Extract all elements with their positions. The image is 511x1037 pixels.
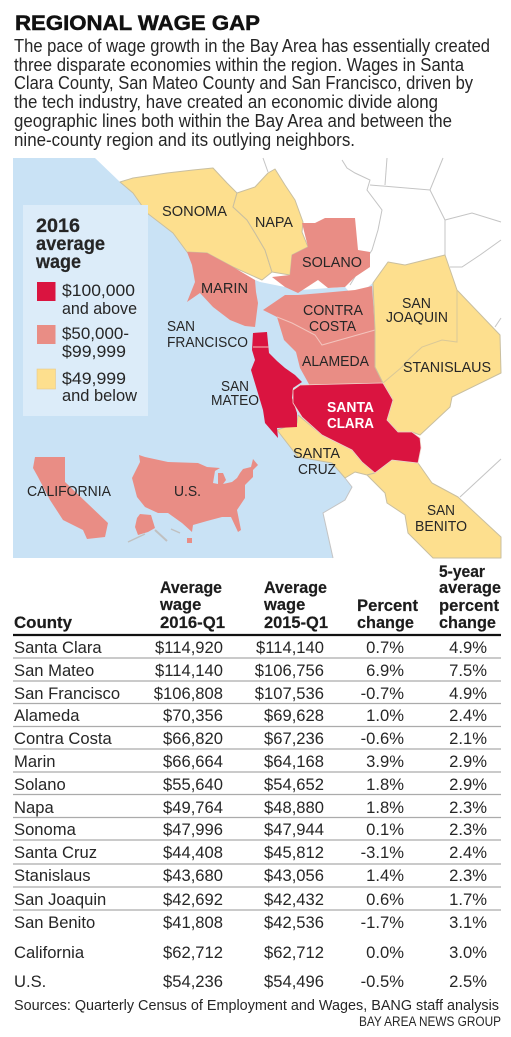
- row: San Benito: -1.7%: [361, 913, 404, 932]
- row: Stanislaus: 2.3%: [449, 866, 487, 885]
- row: Santa Cruz: $45,812: [264, 843, 324, 862]
- table header: Average: [264, 579, 327, 597]
- row: California: $62,712: [163, 943, 223, 962]
- row: Santa Cruz: Santa Cruz: [14, 843, 97, 862]
- row: Napa: $49,764: [163, 798, 223, 817]
- row: San Francisco: 4.9%: [449, 684, 487, 703]
- row: San Mateo: [14, 661, 487, 680]
- row: Napa: [14, 798, 487, 817]
- inset map: California: CALIFORNIA: [27, 484, 111, 500]
- table header: 2016-Q1: [160, 614, 225, 632]
- row: San Mateo: San Mateo: [14, 661, 94, 680]
- table header: wage: [263, 596, 305, 614]
- table rows: [14, 638, 487, 991]
- row: San Joaquin: 1.7%: [449, 890, 487, 909]
- county labels: SOLANO: [302, 255, 362, 271]
- row: Solano: $54,652: [264, 775, 324, 794]
- county labels: COSTA: [309, 319, 356, 335]
- row: San Benito: 3.1%: [449, 913, 487, 932]
- row: Alameda: 1.0%: [366, 706, 404, 725]
- row: Contra Costa: Contra Costa: [14, 729, 113, 748]
- neighbouring county borders: [263, 158, 501, 558]
- row: Stanislaus: $43,680: [163, 866, 223, 885]
- Contra Costa / Alameda border: [277, 317, 375, 345]
- row: Napa: $48,880: [264, 798, 324, 817]
- row: San Joaquin: $42,692: [163, 890, 223, 909]
- row: Santa Clara: 0.7%: [366, 638, 404, 657]
- intro text: three disparate economies within the region. Wages in Santa: [14, 55, 465, 75]
- legend item: $49,999 and below: $49,999: [62, 369, 126, 388]
- table rules: [13, 635, 501, 910]
- row: California: 3.0%: [449, 943, 487, 962]
- legend title: 2016: [36, 216, 80, 237]
- legend item: $100,000 and above: [37, 281, 137, 318]
- row: Napa: Napa: [14, 798, 54, 817]
- row: Alameda: $70,356: [163, 706, 223, 725]
- table header: Average: [160, 579, 222, 597]
- legend item: $100,000 and above: $100,000: [62, 281, 135, 300]
- county labels: STANISLAUS: [403, 360, 491, 376]
- row: Napa: 1.8%: [366, 798, 404, 817]
- inset map: U.S.: U.S.: [174, 484, 201, 500]
- inset map: California: [27, 457, 111, 539]
- panel: map: [13, 158, 501, 558]
- row: Contra Costa: $67,236: [264, 729, 324, 748]
- row: San Mateo: $106,756: [255, 661, 324, 680]
- row: Santa Cruz: -3.1%: [361, 843, 404, 862]
- legend item: $50,000-$99,999: $99,999: [62, 342, 126, 361]
- legend item: $100,000 and above: and above: [62, 299, 137, 318]
- row: Solano: [14, 775, 487, 794]
- county: Sonoma: [120, 168, 272, 280]
- row: Marin: 2.9%: [449, 752, 487, 771]
- county: Napa: [233, 169, 308, 275]
- row: Santa Clara: $114,140: [256, 638, 324, 657]
- row: Sonoma: Sonoma: [14, 820, 77, 839]
- row: Marin: $64,168: [264, 752, 324, 771]
- county labels: SAN: [167, 319, 195, 335]
- San Francisco border: [253, 346, 269, 348]
- row: U.S.: -0.5%: [361, 972, 404, 991]
- county: Santa Clara: [293, 383, 421, 473]
- county: San Mateo and San Francisco: [251, 332, 302, 438]
- legend: [23, 205, 148, 416]
- county labels: SONOMA: [162, 204, 227, 220]
- table header: change: [357, 614, 414, 632]
- legend title: wage: [35, 252, 81, 273]
- county labels: SAN: [427, 503, 455, 519]
- row: U.S.: 2.5%: [449, 972, 487, 991]
- row: California: $62,712: [264, 943, 324, 962]
- row: Sonoma: $47,996: [163, 820, 223, 839]
- table header: County: [14, 614, 73, 632]
- table header: change: [439, 614, 496, 632]
- row: California: California: [14, 943, 85, 962]
- county labels: SANTA: [327, 400, 375, 416]
- county labels: SAN: [402, 296, 431, 312]
- row: Alameda: [14, 706, 487, 725]
- row: Alameda: Alameda: [14, 706, 80, 725]
- intro text: the tech industry, have created an economic divide along: [14, 92, 438, 112]
- row: San Benito: San Benito: [14, 913, 95, 932]
- row: Santa Cruz: 2.4%: [449, 843, 487, 862]
- county labels: SAN: [221, 379, 249, 395]
- county labels: MARIN: [201, 281, 248, 297]
- county: Alameda: [277, 317, 385, 386]
- table header: 5-year: [439, 563, 486, 581]
- row: California: 0.0%: [366, 943, 404, 962]
- row: San Joaquin: San Joaquin: [14, 890, 106, 909]
- legend item: $50,000-$99,999: [37, 324, 129, 361]
- row: Alameda: 2.4%: [449, 706, 487, 725]
- row: Sonoma: [14, 820, 487, 839]
- row: San Francisco: San Francisco: [14, 684, 120, 703]
- row: Solano: Solano: [14, 775, 66, 794]
- row: Santa Cruz: $44,408: [163, 843, 223, 862]
- county: Marin: [187, 252, 258, 327]
- intro text: Clara County, San Mateo County and San Francisco, driven by: [14, 73, 473, 93]
- row: San Joaquin: $42,432: [264, 890, 324, 909]
- county: Santa Cruz: [277, 415, 375, 478]
- row: Santa Clara: 4.9%: [449, 638, 487, 657]
- row: San Benito: [14, 913, 487, 932]
- row: U.S.: $54,496: [264, 972, 324, 991]
- county labels: JOAQUIN: [386, 310, 448, 326]
- row: Stanislaus: 1.4%: [366, 866, 404, 885]
- row: U.S.: [14, 972, 487, 991]
- row: Alameda: $69,628: [264, 706, 324, 725]
- intro text: nine-county region and its outlying neighbors.: [14, 130, 355, 150]
- table header: [14, 563, 501, 632]
- row: San Francisco: [14, 684, 487, 703]
- row: Sonoma: $47,944: [264, 820, 324, 839]
- county: San Joaquin and Stanislaus: [373, 255, 501, 435]
- row: Sonoma: 2.3%: [449, 820, 487, 839]
- table header: wage: [159, 596, 201, 614]
- row: San Francisco: -0.7%: [361, 684, 404, 703]
- county labels: MATEO: [211, 393, 259, 409]
- legend item: $50,000-$99,999: $50,000-: [62, 324, 129, 343]
- row: San Joaquin: 0.6%: [366, 890, 404, 909]
- row: California: [14, 943, 487, 962]
- row: Stanislaus: $43,056: [264, 866, 324, 885]
- intro text: [14, 36, 490, 150]
- row: Napa: 2.3%: [449, 798, 487, 817]
- row: San Mateo: 6.9%: [366, 661, 404, 680]
- legend item: $49,999 and below: and below: [62, 386, 138, 405]
- row: Contra Costa: -0.6%: [361, 729, 404, 748]
- row: Stanislaus: Stanislaus: [14, 866, 91, 885]
- row: Marin: Marin: [14, 752, 56, 771]
- row: Marin: [14, 752, 487, 771]
- row: Santa Clara: Santa Clara: [14, 638, 102, 657]
- county: San Benito: [367, 460, 501, 558]
- county labels: [162, 204, 491, 535]
- table header: percent: [439, 597, 500, 615]
- legend item: $49,999 and below: [37, 369, 138, 405]
- row: San Mateo: $114,140: [155, 661, 223, 680]
- legend title: [35, 216, 105, 273]
- row: Solano: 1.8%: [366, 775, 404, 794]
- county labels: NAPA: [255, 215, 293, 231]
- table header: 2015-Q1: [264, 614, 328, 632]
- row: San Francisco: $107,536: [255, 684, 324, 703]
- table header: Percent: [357, 597, 419, 615]
- row: San Benito: $42,536: [264, 913, 324, 932]
- title: REGIONAL WAGE GAP: [15, 12, 260, 35]
- intro text: geographic lines both within the Bay Area and between the: [14, 111, 452, 131]
- county labels: CRUZ: [298, 462, 336, 478]
- row: Stanislaus: [14, 866, 487, 885]
- row: Solano: 2.9%: [449, 775, 487, 794]
- county labels: ALAMEDA: [302, 354, 369, 370]
- county labels: FRANCISCO: [167, 335, 248, 351]
- row: Santa Clara: $114,920: [155, 638, 223, 657]
- county: Solano: [272, 218, 370, 293]
- row: Contra Costa: 2.1%: [449, 729, 487, 748]
- land background: [13, 158, 501, 558]
- row: Marin: 3.9%: [366, 752, 404, 771]
- county labels: SANTA: [293, 446, 340, 462]
- row: Marin: $66,664: [163, 752, 223, 771]
- row: Contra Costa: $66,820: [163, 729, 223, 748]
- row: San Mateo: 7.5%: [449, 661, 487, 680]
- row: Contra Costa: [14, 729, 487, 748]
- sources: Sources: Quarterly Census of Employment and Wages, BANG staff analysis: [14, 997, 499, 1014]
- row: Sonoma: 0.1%: [366, 820, 404, 839]
- row: Santa Clara: [14, 638, 487, 657]
- row: U.S.: $54,236: [163, 972, 223, 991]
- inset map: U.S.: [128, 455, 258, 543]
- county labels: CONTRA: [303, 303, 363, 319]
- table header: average: [439, 579, 501, 597]
- ocean and bay: [13, 158, 378, 558]
- row: San Joaquin: [14, 890, 487, 909]
- row: Solano: $55,640: [163, 775, 223, 794]
- row: Santa Cruz: [14, 843, 487, 862]
- San Joaquin / Stanislaus border: [383, 290, 457, 383]
- county labels: CLARA: [327, 416, 374, 432]
- county labels: BENITO: [415, 519, 467, 535]
- county: Contra Costa: [263, 286, 375, 345]
- row: U.S.: U.S.: [14, 972, 46, 991]
- row: San Francisco: $106,808: [154, 684, 223, 703]
- legend title: average: [36, 234, 105, 255]
- row: San Benito: $41,808: [163, 913, 223, 932]
